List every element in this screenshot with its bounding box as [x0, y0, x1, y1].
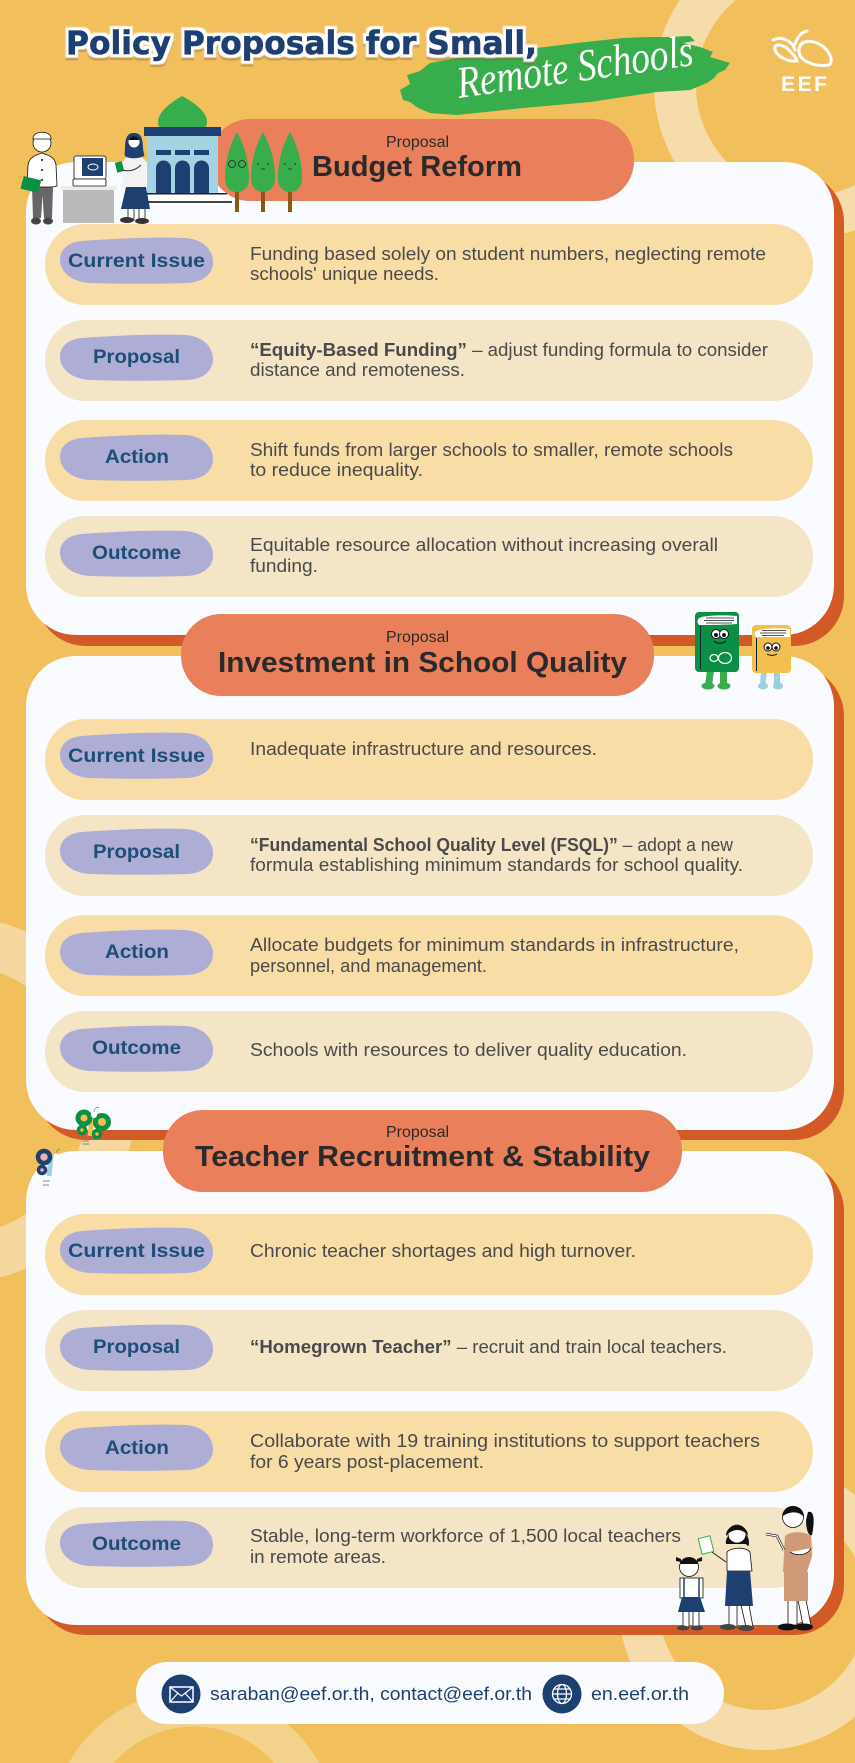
row: proposal: formula establishing minimum standards for school quality. — [250, 855, 743, 875]
row: current issue — [45, 1214, 813, 1295]
row: outcome — [45, 1507, 813, 1588]
teacher — [766, 1506, 814, 1630]
row: proposal: “Equity-Based Funding” – adjust funding formula to consider — [250, 340, 768, 360]
man with folder — [21, 132, 57, 224]
section header: budget reform: Proposal — [386, 134, 449, 151]
child — [676, 1557, 705, 1630]
green butterfly — [78, 1107, 108, 1144]
student in hijab — [115, 133, 150, 224]
section header: teacher recruitment and stability: Teacher Recruitment & Stability — [195, 1141, 650, 1173]
website: en.eef.or.th — [591, 1684, 689, 1704]
title: Policy Proposals for Small, — [66, 24, 537, 62]
row: action: for 6 years post-placement. — [250, 1452, 484, 1472]
EEF logo: EEF — [781, 73, 827, 96]
computer on desk — [61, 156, 117, 223]
yellow book — [752, 625, 791, 690]
row: current issue: Current Issue — [68, 1241, 205, 1262]
icon: email — [162, 1674, 200, 1714]
EEF logo — [773, 31, 831, 96]
illustration: school with man, computer, student and trees — [21, 96, 302, 224]
row: current issue — [45, 719, 813, 800]
email addresses: saraban@eef.or.th, contact@eef.or.th — [210, 1684, 532, 1704]
section header: investment in school quality: Investment in School Quality — [218, 647, 627, 679]
row: outcome — [45, 516, 813, 597]
blue butterfly — [38, 1149, 60, 1185]
tree 2 — [251, 132, 275, 212]
row: current issue: Current Issue — [68, 251, 205, 272]
panel: investment in school quality — [26, 614, 844, 1140]
row: outcome: in remote areas. — [250, 1547, 386, 1567]
row: action — [45, 420, 813, 501]
row: proposal — [45, 1310, 813, 1391]
section header: investment in school quality — [181, 614, 654, 696]
illustration: butterflies — [38, 1107, 108, 1185]
title highlight: green brush with script text — [400, 25, 730, 115]
row: action: Allocate budgets for minimum standards in infrastructure, — [250, 935, 739, 955]
row: action: Action — [105, 447, 169, 468]
section header: investment in school quality: Proposal — [386, 629, 449, 646]
row: outcome: Schools with resources to deliver quality education. — [250, 1040, 687, 1060]
row: proposal — [45, 815, 813, 896]
illustration: teachers and student — [676, 1506, 814, 1631]
panel: budget reform — [26, 119, 844, 646]
building — [144, 96, 232, 203]
row: outcome: Outcome — [92, 543, 181, 564]
icon: globe — [542, 1674, 582, 1714]
panel shadow — [36, 1161, 844, 1635]
row: action: Collaborate with 19 training institutions to support teachers — [250, 1431, 760, 1451]
background ring: bottom right — [619, 1462, 855, 1750]
row: current issue — [45, 224, 813, 305]
illustration: walking books — [695, 612, 791, 690]
row: action: Action — [105, 942, 169, 963]
row: proposal: “Fundamental School Quality Level (FSQL)” – adopt a new — [250, 835, 734, 855]
row: proposal: Proposal — [93, 347, 180, 368]
row: proposal: distance and remoteness. — [250, 360, 465, 380]
row: action: personnel, and management. — [250, 956, 487, 976]
tree 3 — [278, 132, 302, 212]
panel body — [26, 1151, 834, 1625]
row: action: to reduce inequality. — [250, 460, 423, 480]
background ring: left — [0, 922, 136, 1278]
tree 1 with glasses — [225, 132, 249, 212]
contact bar — [136, 1662, 724, 1724]
student with card — [698, 1525, 754, 1631]
row: action: Shift funds from larger schools to smaller, remote schools — [250, 440, 733, 460]
background ring: top right — [654, 0, 855, 238]
panel body — [26, 162, 834, 635]
section header: budget reform — [210, 119, 634, 201]
title highlight: green brush with script text: Remote Schools — [453, 25, 696, 108]
row: current issue: Inadequate infrastructure and resources. — [250, 739, 597, 759]
row: proposal: Proposal — [93, 842, 180, 863]
panel shadow — [36, 666, 844, 1140]
row: current issue: Chronic teacher shortages and high turnover. — [250, 1241, 636, 1261]
row: proposal: Proposal — [93, 1337, 180, 1358]
row: proposal — [45, 320, 813, 401]
row: outcome: Equitable resource allocation without increasing overall — [250, 535, 718, 555]
row: action — [45, 1411, 813, 1492]
section header: teacher recruitment and stability — [163, 1110, 682, 1192]
row: action — [45, 915, 813, 996]
row: outcome: funding. — [250, 556, 318, 576]
row: current issue: schools' unique needs. — [250, 264, 439, 284]
row: outcome: Outcome — [92, 1534, 181, 1555]
row: current issue: Funding based solely on student numbers, neglecting remote — [250, 244, 766, 264]
row: outcome — [45, 1011, 813, 1092]
row: outcome: Outcome — [92, 1038, 181, 1059]
background ring: bottom left — [69, 1689, 319, 1763]
green book — [695, 612, 739, 690]
row: proposal: “Homegrown Teacher” – recruit and train local teachers. — [250, 1337, 727, 1357]
row: outcome: Stable, long-term workforce of 1,500 local teachers — [250, 1526, 681, 1546]
panel shadow — [36, 172, 844, 646]
section header: teacher recruitment and stability: Proposal — [386, 1124, 449, 1141]
row: action: Action — [105, 1438, 169, 1459]
panel: teacher recruitment and stability — [26, 1110, 844, 1635]
section header: budget reform: Budget Reform — [312, 151, 522, 183]
panel body — [26, 656, 834, 1130]
row: current issue: Current Issue — [68, 746, 205, 767]
